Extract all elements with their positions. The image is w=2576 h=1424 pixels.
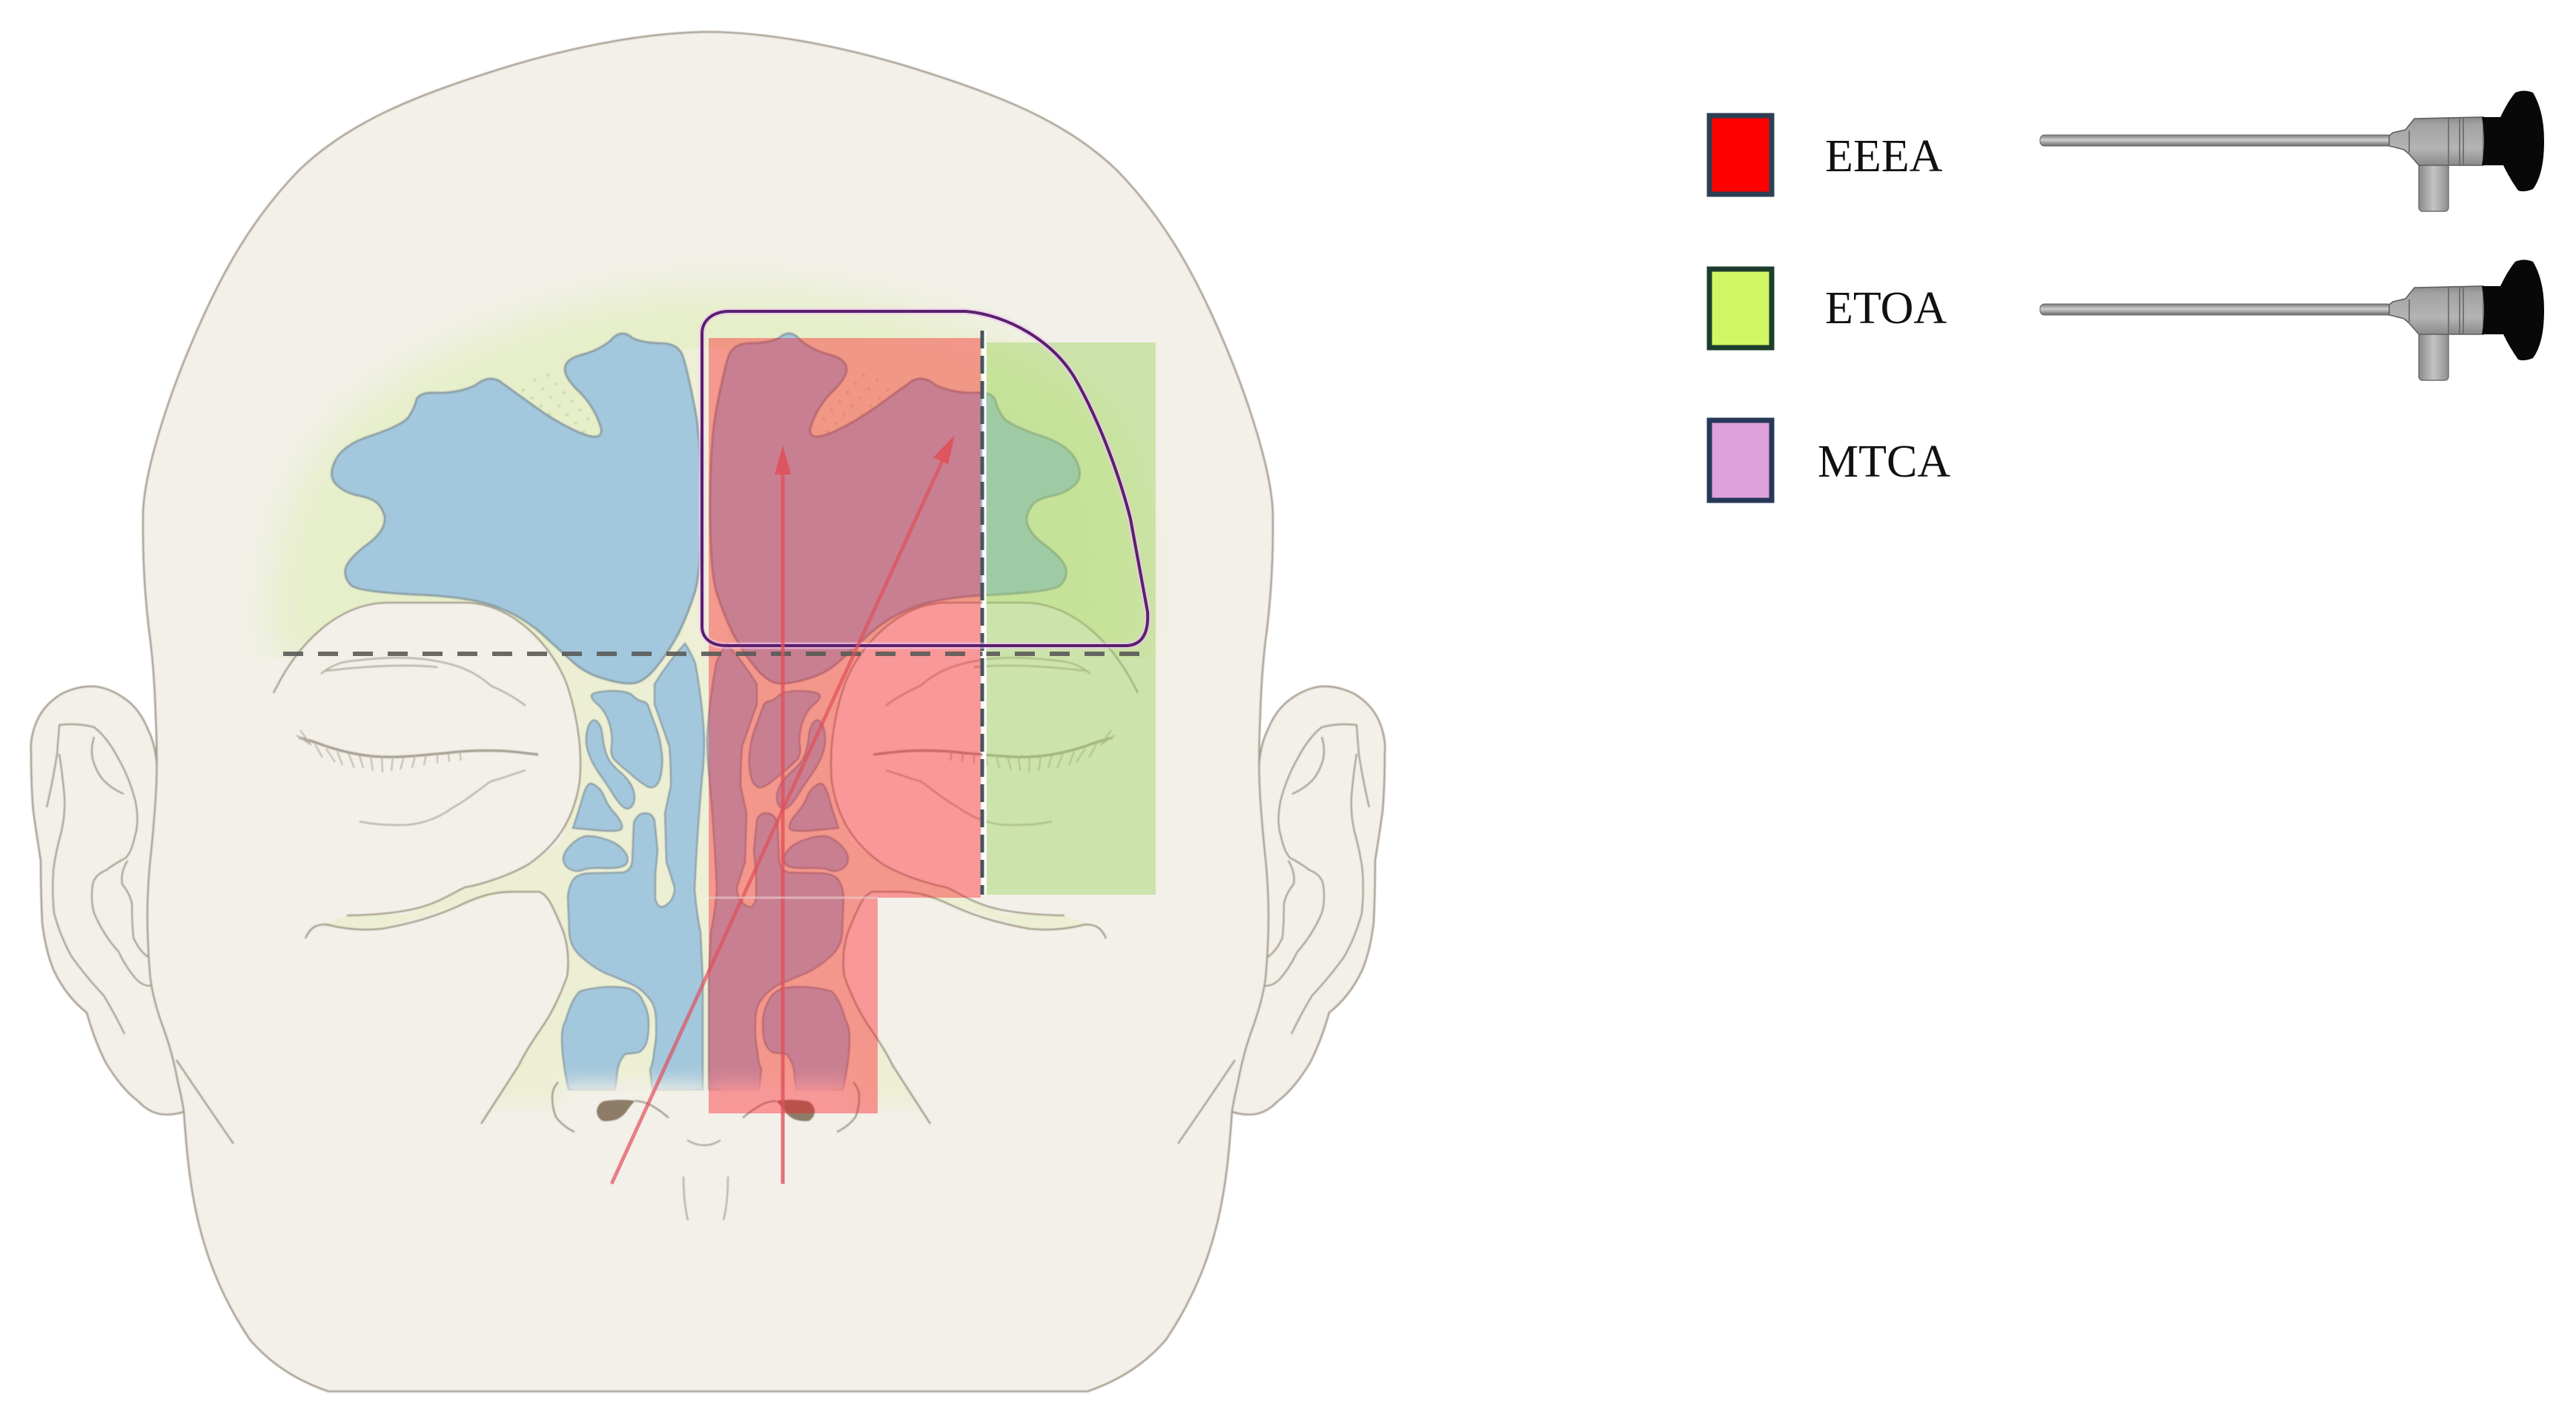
legend label: MTCA: MTCA	[1818, 437, 1950, 487]
pale green bone halo around frontal sinus	[271, 285, 1147, 667]
right ear	[1231, 686, 1385, 1115]
arrow: angled endonasal trajectory	[612, 435, 955, 1184]
endoscope icon: ETOA	[2040, 259, 2544, 380]
legend swatch: MTCA	[1709, 420, 1772, 500]
legend swatch: EEEA	[1709, 116, 1772, 194]
ETOA green zone	[987, 342, 1156, 895]
vertical dashed midline of the orbit	[982, 331, 984, 895]
legend label: ETOA: ETOA	[1825, 283, 1947, 334]
nose tip	[687, 1140, 721, 1145]
arrow: straight midline endonasal trajectory	[775, 446, 791, 1184]
legend label: EEEA: EEEA	[1825, 131, 1943, 182]
left anatomy: frontal sinus, ethmoid cells, eye, nose	[176, 334, 706, 1220]
faint seam across the red zone	[709, 897, 878, 898]
head outline	[143, 32, 1273, 1391]
left ear	[31, 686, 185, 1115]
right anatomy: frontal sinus, ethmoid cells, eye, nose	[706, 334, 1235, 1220]
horizontal dashed reference line	[283, 652, 1150, 656]
MTCA purple outline	[702, 311, 1148, 646]
endoscope icon: EEEA	[2040, 90, 2544, 211]
face illustration	[31, 32, 1385, 1391]
EEEA red zone	[709, 338, 981, 1113]
legend swatch: ETOA	[1709, 269, 1772, 348]
